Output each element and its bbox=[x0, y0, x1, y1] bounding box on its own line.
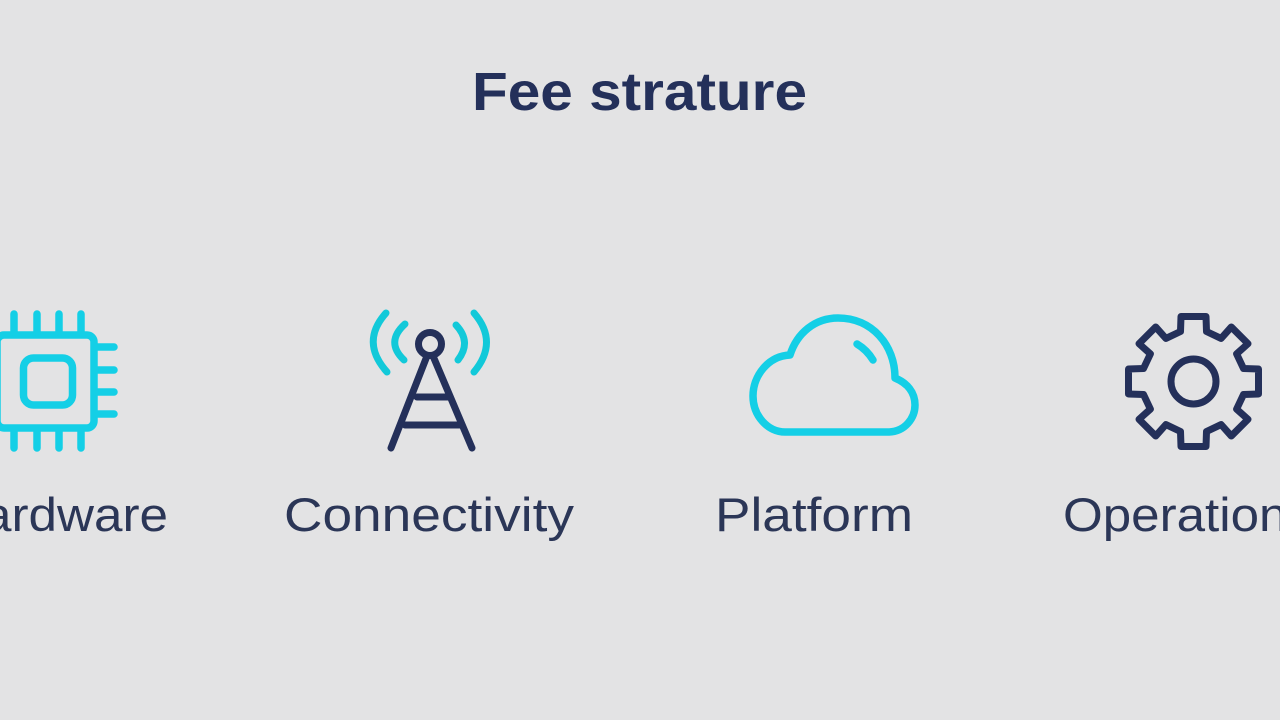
title: Fee strature bbox=[472, 62, 807, 122]
icon: hardware chip bbox=[0, 314, 114, 448]
icon: connectivity tower bbox=[373, 313, 486, 448]
icon: platform cloud bbox=[753, 318, 915, 432]
icon: operations gear bbox=[1128, 316, 1258, 446]
label: connectivity: Connectivity bbox=[284, 488, 575, 541]
label: platform: Platform bbox=[715, 488, 913, 541]
